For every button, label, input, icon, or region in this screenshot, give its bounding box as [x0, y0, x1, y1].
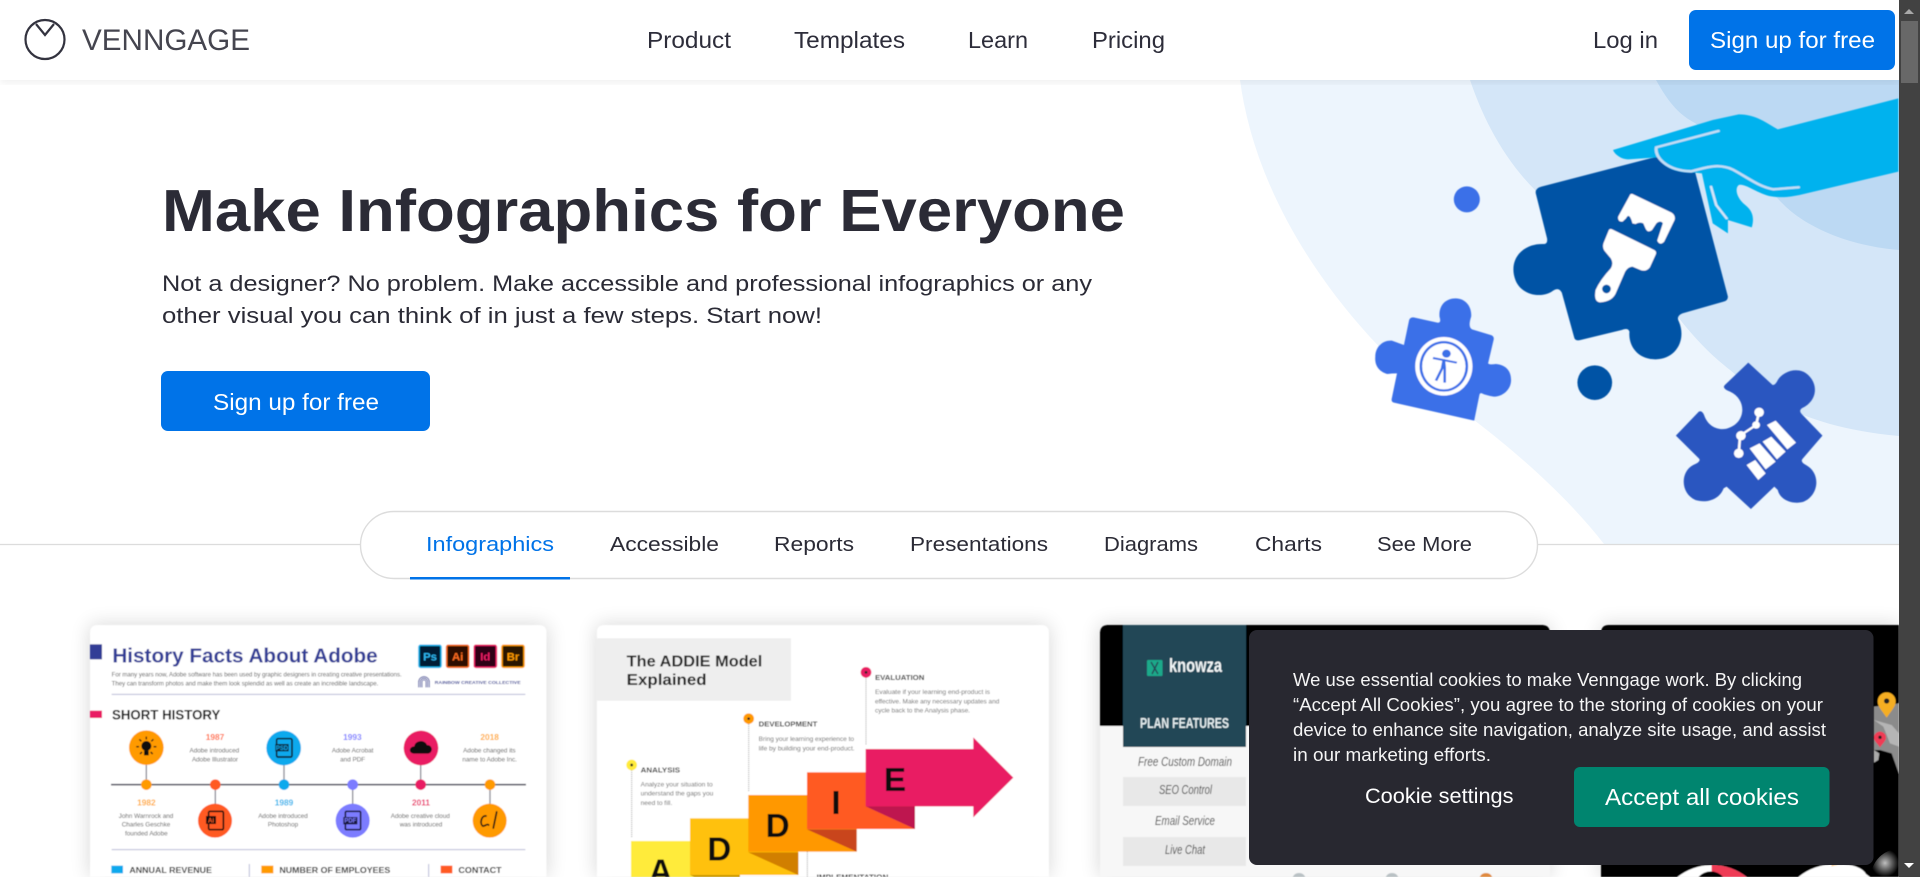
step markers and text: Bring your learning experience to	[759, 737, 855, 743]
template card: knowza plan features	[1100, 625, 1550, 877]
feature rows: Live Chat	[1165, 843, 1205, 857]
map pins	[1878, 692, 1896, 718]
cookie message	[1293, 669, 1826, 765]
Adobe app icons: Id	[480, 651, 490, 663]
timeline captions: Charles Geschke	[122, 822, 171, 829]
step markers and text: EVALUATION	[875, 673, 925, 682]
category tabs: Charts	[1255, 534, 1322, 556]
template card: knowza plan features: PLAN FEATURES	[1140, 715, 1229, 732]
icon: signature pen	[481, 812, 497, 828]
section headings	[111, 864, 502, 877]
timeline captions: Adobe creative cloud	[391, 813, 450, 820]
corner glow on black card	[1871, 849, 1899, 877]
nav links: Pricing	[1092, 27, 1165, 53]
hero sign up button	[161, 371, 430, 431]
hero description	[162, 271, 1092, 328]
timeline captions: founded Adobe	[125, 830, 168, 837]
map	[1874, 692, 1899, 774]
card title	[597, 638, 791, 701]
hand holding puzzle piece	[1613, 98, 1898, 233]
small blue dot	[1454, 186, 1480, 212]
icon: Illustrator file	[206, 811, 223, 830]
card shadows	[90, 625, 1899, 877]
timeline years: 2018	[480, 732, 499, 742]
timeline captions: Adobe changed its	[463, 748, 516, 755]
card title: The ADDIE Model	[627, 654, 762, 671]
nav links: Product	[647, 27, 732, 53]
template card: History Facts About Adobe: For many years now, Adobe software has been used by graphic designers in creating creative presentations.	[112, 673, 402, 679]
icon: PSD file	[275, 739, 292, 757]
timeline captions: Adobe Illustrator	[192, 756, 238, 763]
icon: Illustrator file: Ai	[208, 817, 214, 824]
step markers and text: DEVELOPMENT	[759, 720, 818, 729]
category tabs: See More	[1377, 534, 1472, 556]
feature rows	[1123, 755, 1246, 866]
timeline captions: name to Adobe Inc.	[462, 756, 517, 763]
cookie message: device to enhance site navigation, analyze site usage, and assist	[1293, 719, 1826, 740]
section headings: CONTACT	[458, 865, 502, 875]
category tabs: Accessible	[610, 534, 719, 556]
cookie message: “Accept All Cookies”, you agree to the storing of cookies on your	[1293, 694, 1823, 715]
timeline captions: Adobe Acrobat	[332, 748, 374, 755]
category tabs: Infographics	[426, 534, 554, 556]
knowza logo: knowza	[1169, 656, 1222, 677]
nav links: Learn	[968, 27, 1028, 53]
step markers and text: Analyze your situation to	[641, 782, 713, 788]
template card: History Facts About Adobe: They can transform photos and make them look splendid as well as create an incredible landscape.	[112, 682, 379, 688]
feature rows: Email Service	[1155, 814, 1215, 828]
Rainbow Creative Collective logo	[419, 677, 429, 687]
template card: History Facts About Adobe: History Facts About Adobe	[112, 644, 378, 667]
category tabs: Diagrams	[1104, 534, 1198, 556]
cookie settings link: Cookie settings	[1365, 785, 1514, 808]
Adobe app icons: Ai	[452, 651, 463, 663]
nav sign up button: Sign up for free	[1710, 27, 1875, 53]
hero illustration: puzzle pieces and hand	[1375, 98, 1898, 509]
royal blue puzzle piece with chart icon	[1676, 363, 1822, 509]
timeline captions: was introduced	[399, 822, 443, 829]
template card: ADDIE Model	[597, 625, 1049, 877]
navigation bar	[0, 0, 1920, 82]
step markers and text: cycle back to the Analysis phase.	[875, 709, 970, 715]
hero description: other visual you can think of in just a few steps. Start now!	[162, 303, 822, 328]
icon: cloud	[410, 741, 432, 754]
timeline captions: Adobe introduced	[190, 748, 240, 755]
Adobe app icons	[419, 645, 524, 667]
ADDIE staircase arrow: D	[766, 808, 790, 845]
step markers and text: understand the gaps you	[641, 792, 713, 798]
timeline captions: and PDF	[340, 756, 365, 763]
blue puzzle piece with accessibility icon	[1375, 298, 1511, 421]
step markers and text: Evaluate if your learning end-product is	[875, 690, 990, 696]
donut charts	[1677, 864, 1870, 877]
nav links: Templates	[794, 27, 905, 53]
cookie consent panel	[1249, 630, 1874, 865]
timeline years	[137, 732, 499, 808]
step markers and text	[626, 667, 999, 877]
hero sign up button: Sign up for free	[213, 389, 379, 415]
Adobe app icons: Ps	[423, 651, 437, 663]
icon: Venngage logo mark	[26, 20, 64, 59]
accept cookies button: Accept all cookies	[1605, 784, 1799, 810]
template card: History Facts About Adobe: RAINBOW CREATIVE COLLECTIVE	[435, 680, 521, 686]
nav links: Log in	[1593, 27, 1658, 53]
cookie message: We use essential cookies to make Venngage work. By clicking	[1293, 669, 1802, 690]
nav sign up button	[1689, 10, 1895, 70]
step markers and text: effective. Make any necessary updates and	[875, 699, 999, 705]
step markers and text: need to fill.	[641, 801, 673, 807]
feature rows: SEO Control	[1159, 783, 1213, 797]
timeline captions: Adobe introduced	[258, 813, 308, 820]
hero heading: Make Infographics for Everyone	[162, 178, 1125, 244]
ADDIE staircase arrow: D	[707, 831, 731, 868]
nav links	[647, 27, 1658, 53]
browser scrollbar	[1899, 0, 1920, 877]
ADDIE staircase arrow	[631, 737, 1013, 877]
section headings: NUMBER OF EMPLOYEES	[279, 865, 391, 875]
step markers and text: life by building your end-product.	[759, 746, 855, 752]
template card: History Facts About Adobe: SHORT HISTORY	[112, 707, 221, 723]
accept cookies button	[1574, 767, 1830, 827]
dark puzzle piece with paintbrush	[1513, 148, 1728, 359]
section headings: ANNUAL REVENUE	[129, 865, 212, 875]
feature rows: Free Custom Domain	[1138, 755, 1232, 769]
active tab underline	[410, 577, 570, 580]
knowza logo	[1147, 656, 1222, 677]
ADDIE staircase arrow: E	[884, 762, 906, 799]
hero description: Not a designer? No problem. Make accessible and professional infographics or any	[162, 271, 1092, 296]
timeline captions	[119, 748, 517, 837]
ADDIE staircase arrow: I	[831, 785, 841, 822]
template card: History Facts About Adobe	[90, 625, 547, 877]
category tabs	[360, 512, 1538, 580]
hero background curves	[1240, 80, 1899, 544]
timeline years: 1993	[343, 732, 362, 742]
template card: black map and donut charts	[1601, 625, 1899, 877]
cookie message: in our marketing efforts.	[1293, 744, 1491, 765]
step markers and text: ANALYSIS	[641, 765, 680, 774]
icon: PDF file: PDF	[344, 819, 357, 825]
timeline years: 1989	[275, 798, 294, 808]
timeline years: 2011	[412, 798, 430, 808]
Adobe app icons: Br	[507, 651, 520, 663]
timeline	[111, 730, 526, 838]
timeline captions: John Warnrock and	[119, 813, 174, 820]
timeline years: 1982	[137, 798, 156, 808]
category tabs: Presentations	[910, 534, 1048, 556]
dark blue dot	[1577, 365, 1612, 400]
category tabs: Reports	[774, 534, 854, 556]
card title: Explained	[627, 672, 707, 689]
timeline captions: Photoshop	[268, 822, 299, 829]
timeline years: 1987	[206, 732, 225, 742]
icon: PDF file	[343, 811, 361, 830]
icon: PSD file: PSD	[276, 746, 289, 752]
logo wordmark: VENNGAGE	[82, 24, 250, 57]
icon: light bulb	[136, 737, 156, 755]
